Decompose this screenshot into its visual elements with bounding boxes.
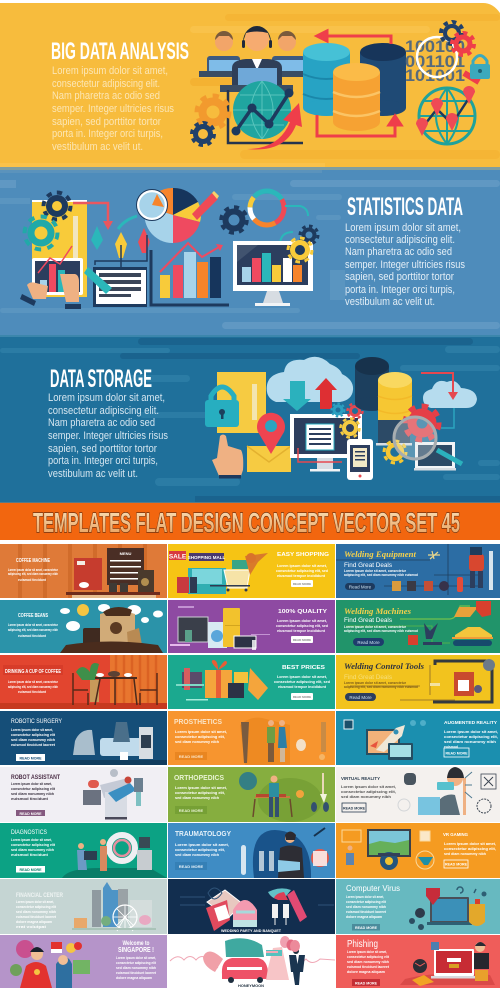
panel: data storage	[0, 335, 500, 502]
heading: big data analysis: BIG DATA ANALYSIS	[51, 38, 189, 65]
panel: virtual reality	[336, 767, 500, 822]
text block: euismod tincidunt	[18, 690, 47, 694]
text block: dolore magna aliquam	[116, 976, 152, 980]
text block: euismod tincidunt	[11, 797, 49, 801]
icon: shopping mall and cart	[169, 551, 268, 594]
text block: storage body: sapien, sed porttitor tortor	[48, 443, 157, 455]
text block	[274, 675, 330, 689]
text block: consectetur adipiscing elit,	[175, 735, 225, 739]
text block: Lorem ipsum dolor sit amet,	[175, 730, 227, 734]
heading: Welding Machines	[344, 607, 411, 616]
text block	[16, 900, 57, 929]
icon: welding control frame	[430, 659, 495, 702]
text block: Find Great Deals	[344, 674, 393, 681]
text block: euismod tincidunt laoreet	[11, 743, 56, 747]
icon: center gears	[332, 404, 362, 438]
icon: navy gear	[192, 123, 214, 145]
text block: statistics body: porta in. Integer orci turpis,	[345, 284, 455, 296]
text block: binary digits	[405, 37, 465, 85]
text block: erat volutpat	[16, 925, 47, 929]
button: READ MORE	[179, 864, 204, 869]
icon: couple in singapore	[10, 940, 90, 988]
text block: big data body: semper. Integer ultricies risus	[52, 103, 174, 115]
heading: ORTHOPEDICS	[174, 775, 224, 782]
text block: sed diam nonummy nibh	[175, 853, 219, 857]
text block: statistics body: consectetur adipiscing elit.	[345, 234, 455, 246]
text block: sed diam nonummy nibh	[175, 796, 219, 800]
text block: adipiscing elit, sed diam nonummy nibh	[8, 628, 58, 632]
icon: orange gear	[197, 96, 229, 128]
text block: adipiscing elit, sed diam nonummy nibh	[8, 685, 58, 689]
panel: financial center	[0, 879, 167, 934]
text block: euismod	[444, 745, 458, 749]
text block: adipiscing elit, sed diam nonummy nibh euismod	[344, 573, 418, 577]
text block	[444, 842, 496, 856]
heading: Phishing	[347, 939, 378, 950]
text block: Lorem ipsum dolor sit amet,	[347, 950, 387, 954]
heading: EASY SHOPPING	[277, 552, 329, 558]
text block: Lorem ipsum dolor sit amet,	[341, 785, 396, 789]
text block: statistics body: sapien, sed porttitor tortor	[345, 271, 454, 283]
button: READ MORE	[179, 754, 204, 759]
text block: Find Great Deals	[344, 562, 393, 569]
button: READ MORE	[20, 812, 42, 816]
text block: statistics body	[345, 222, 465, 308]
text block: adipiscing elit, sed diam nonummy nibh	[8, 572, 58, 576]
button: READ MORE	[293, 695, 311, 699]
text block: consectetur adipiscing elit,	[444, 847, 496, 851]
panel: computer virus	[336, 879, 500, 934]
panel: best prices	[168, 655, 335, 709]
icon: database cylinders	[303, 43, 406, 131]
button: Read More	[349, 695, 372, 700]
panel: orthopedics	[168, 767, 335, 822]
button: READ MORE	[293, 582, 311, 586]
button	[444, 860, 468, 868]
text block: euismod tincidunt laoreet	[347, 965, 390, 969]
icon: magnifier, gears and laptop	[384, 406, 462, 470]
text block: Lorem ipsum dolor sit amet, consectetur	[344, 625, 407, 629]
button	[16, 810, 45, 816]
button	[291, 693, 313, 700]
chart: pie with magnifier	[136, 188, 219, 243]
icon: city skyline with ferris wheel	[72, 882, 156, 931]
button: READ MORE	[446, 752, 468, 756]
text block: Lorem ipsum dolor sit amet,	[11, 838, 52, 842]
heading: HONEYMOON	[238, 983, 264, 988]
text block: euismod tincidunt laoreet	[116, 971, 157, 975]
icon: large cloud with arrows	[267, 357, 353, 411]
text block: Lorem ipsum dolor sit amet,	[175, 843, 229, 847]
text block: Lorem ipsum dolor sit amet, consectetur	[8, 623, 59, 627]
chart: globe with trend line	[228, 81, 303, 150]
text block: Lorem ipsum dolor sit amet,	[444, 730, 498, 734]
icon: tablet held in hands	[20, 246, 83, 309]
text block: consectetur adipiscing elit, sed	[274, 680, 330, 684]
text block: sed diam nonummy nibh	[11, 792, 54, 796]
heading: Welcome to	[122, 941, 150, 947]
panel: welding equipment	[336, 544, 500, 598]
text block: Lorem ipsum dolor sit amet,	[277, 564, 327, 568]
text block: binary digits: 100100	[405, 37, 465, 56]
text block: euismod tincidunt	[18, 634, 47, 638]
text block	[11, 838, 56, 857]
icon: tablet with rocket	[344, 720, 426, 760]
icon: injured man with x-ray	[241, 828, 329, 878]
heading: COFFEE BEANS	[18, 613, 49, 619]
button: READ MORE	[293, 638, 311, 642]
panel: traumatology	[168, 823, 335, 878]
text block: sed diam nonummy nibh	[116, 966, 156, 970]
icon: sacks of coffee	[60, 604, 163, 653]
heading: TRAUMATOLOGY	[175, 831, 231, 838]
heading: VIRTUAL REALITY	[341, 776, 380, 781]
panel: welcome to singapore	[0, 935, 167, 988]
heading: 100% QUALITY	[278, 609, 327, 615]
chart: bar chart with trend	[151, 243, 229, 305]
panel: coffee beans	[0, 600, 167, 653]
text block	[8, 623, 59, 638]
panel: prosthetics	[168, 711, 335, 765]
text block: binary digits: 001101	[405, 52, 465, 71]
text block	[276, 619, 328, 633]
text block: adipiscing elit, sed diam nonummy nibh euismod	[344, 629, 418, 633]
button	[291, 636, 313, 643]
panel: wedding party and banquet	[168, 879, 335, 934]
text block: Lorem ipsum dolor sit amet,	[346, 895, 384, 899]
icon: car, bride and groom	[203, 936, 305, 985]
icon: folder, lock and hand	[205, 372, 266, 478]
text block: sed diam nonummy nibh	[11, 848, 54, 852]
text block: Lorem ipsum dolor sit amet,	[116, 956, 156, 960]
button	[16, 754, 45, 761]
text block: big data body: sapien, sed porttitor tortor	[52, 116, 161, 128]
button: READ MORE	[179, 808, 204, 813]
text block: sed diam nonummy nibh	[175, 740, 219, 744]
panel: easy shopping	[168, 544, 335, 598]
button	[353, 638, 384, 646]
text block: storage body: vestibulum ac velit ut.	[48, 468, 138, 480]
text block: statistics body: Nam pharetra ac odio sed	[345, 246, 452, 258]
icon: coffee machine and menu: MENU	[120, 551, 131, 556]
panel: 100% quality	[168, 600, 335, 653]
text block	[344, 569, 418, 577]
icon: surgical robot scene	[73, 722, 153, 760]
text block: statistics body: semper. Integer ultricies risus	[345, 259, 465, 271]
text block: storage body: Nam pharetra ac odio sed	[48, 417, 155, 429]
text block: sed diam nonummy nibh	[347, 960, 389, 964]
text block: dolore magna aliquam	[347, 970, 385, 974]
panel: statistics data	[0, 170, 500, 335]
heading: ROBOT ASSISTANT	[11, 775, 60, 781]
icon: welder and tools	[392, 547, 493, 592]
text block: euismod tincidunt	[18, 578, 47, 582]
icon: map pin and envelope	[247, 413, 291, 472]
panel: big data analysis	[0, 3, 500, 170]
button	[175, 752, 207, 760]
text block: Lorem ipsum dolor sit amet,	[444, 842, 496, 846]
button	[342, 803, 366, 812]
text block: storage body: semper. Integer ultricies risus	[48, 430, 168, 442]
button: READ MORE	[355, 926, 378, 930]
icon: monitor with bar chart	[233, 241, 313, 306]
text block	[444, 730, 498, 749]
text block: eiusmod tempor incididunt	[277, 629, 326, 633]
icon: patients and prosthetics	[240, 718, 326, 765]
icon: support operators	[199, 26, 305, 92]
text block: euismod tincidunt laoreet	[16, 915, 57, 919]
text block: consectetur adipiscing elit,	[341, 790, 396, 794]
text block	[344, 625, 418, 633]
button	[291, 580, 313, 587]
heading: FINANCIAL CENTER	[16, 892, 63, 899]
icon: gears and donut	[221, 191, 308, 245]
text block: consectetur adipiscing elit,	[175, 848, 225, 852]
panel: welding machines	[336, 600, 500, 653]
text block	[175, 730, 227, 744]
icon: small cloud with arrow	[421, 373, 477, 428]
text block	[276, 564, 328, 578]
text block: consectetur adipiscing elit	[347, 955, 390, 959]
text block: consectetur adipiscing elit	[11, 787, 56, 791]
icon: shopping mall and cart: SHOPPING MALL	[188, 555, 225, 560]
button: READ MORE	[20, 756, 42, 760]
text block: statistics body: vestibulum ac velit ut.	[345, 296, 435, 308]
panel: robot assistant	[0, 767, 167, 822]
heading: DRINKING A CUP OF COFFEE	[5, 669, 62, 675]
text block: Lorem ipsum dolor sit amet, consectetur	[8, 568, 59, 572]
arrow: red data loop	[317, 31, 401, 136]
heading: BEST PRICES	[282, 665, 325, 671]
panel: vr gaming	[336, 823, 500, 878]
icon: small gears	[441, 22, 474, 55]
text block	[175, 843, 229, 857]
text block: sed diam nonummy nibh	[346, 905, 386, 909]
button: Read More	[349, 584, 372, 590]
text block: big data body: Lorem ipsum dolor sit amet,	[52, 65, 168, 77]
text block	[11, 728, 56, 747]
text block: sed diam nonummy nibh	[11, 738, 55, 742]
text block: consectetur adipiscing elit	[11, 843, 56, 847]
button	[175, 806, 207, 814]
icon: yellow document with gears	[24, 192, 87, 297]
button	[345, 583, 375, 590]
heading: data storage: DATA STORAGE	[50, 365, 152, 393]
text block: sed diam nonummy nibh	[444, 740, 496, 744]
heading: Welding Equipment	[344, 550, 417, 559]
text block	[344, 681, 418, 689]
icon: monitor gears	[288, 226, 318, 262]
text block	[8, 680, 59, 694]
button: READ MORE	[445, 862, 468, 866]
text block: adipiscing elit, sed diam nonummy nibh euismod	[344, 685, 418, 689]
text block: Lorem ipsum dolor sit amet,	[16, 900, 54, 904]
text block: consectetur adipiscing elit	[116, 961, 157, 965]
heading: Welding Control Tools	[344, 662, 424, 671]
button	[345, 693, 376, 701]
icon: monitor with document	[290, 414, 362, 472]
text block: consectetur adipiscing elit, sed	[276, 624, 328, 628]
panel: robotic surgery	[0, 711, 167, 765]
text block: sed diam nonummy nibh	[341, 795, 391, 799]
button: READ MORE	[20, 868, 42, 872]
text block: Lorem ipsum dolor sit amet,	[11, 728, 53, 732]
panel: welding control tools	[336, 655, 500, 709]
text block: storage body	[48, 392, 168, 480]
button	[175, 862, 207, 870]
text block: big data body	[52, 65, 174, 153]
icon: heart strings	[170, 956, 335, 968]
text block	[11, 782, 56, 801]
text block: eiusmod tempor incididunt	[278, 685, 327, 689]
icon: shopping mall and cart: SALE	[169, 554, 187, 560]
panel: coffee machine	[0, 544, 167, 598]
text block: consectetur adipiscing elit	[11, 733, 56, 737]
heading: COFFEE MACHINE	[16, 558, 51, 564]
text block: euismod tincidunt laoreet	[346, 910, 387, 914]
icon: globe with map pins	[416, 86, 475, 144]
icon: mri scanner and staff	[77, 835, 152, 871]
icon: document list with pencil	[84, 267, 147, 307]
text block: Lorem ipsum dolor sit amet, consectetur	[344, 569, 407, 573]
button	[352, 924, 380, 930]
text block: sed diam nonummy nibh	[16, 910, 56, 914]
icon: wedding cake and champagne	[180, 888, 334, 931]
text block: big data body: Nam pharetra ac odio sed	[52, 90, 160, 102]
panel: diagnostics	[0, 823, 167, 878]
text block: Lorem ipsum dolor sit amet,	[11, 782, 52, 786]
arrow: red flow arrow	[73, 203, 113, 230]
text block: storage body: consectetur adipiscing elit.	[48, 405, 159, 417]
text block: consectetur adipiscing elit	[346, 900, 387, 904]
panel: honeymoon	[168, 935, 335, 988]
icon: laptop with shield and virus	[409, 887, 486, 930]
icon: hacker, phishing fish and laptop	[400, 942, 495, 986]
text block: storage body: Lorem ipsum dolor sit amet,	[48, 392, 165, 404]
icon: phone	[347, 439, 373, 480]
icon: coffee machine and menu	[66, 548, 160, 598]
text block: big data body: consectetur adipiscing elit.	[52, 78, 160, 90]
text block: Find Great Deals	[344, 617, 393, 624]
banner: set title	[0, 502, 500, 540]
icon: robot assistant scene	[83, 769, 143, 820]
text block	[8, 568, 59, 582]
button	[444, 748, 469, 757]
text block: consectetur adipiscing elit,	[444, 735, 498, 739]
text block	[116, 956, 157, 980]
button: READ MORE	[343, 806, 366, 810]
text block: eiusmod tempor incididunt	[277, 574, 326, 578]
icon: cafe table	[73, 663, 157, 705]
text block	[346, 895, 387, 919]
icon: padlock	[470, 56, 490, 79]
button: READ MORE	[355, 982, 378, 986]
text block: consectetur adipiscing elit	[16, 905, 57, 909]
panel: augmented reality	[336, 711, 500, 765]
icon: gift box and price tag	[176, 660, 268, 700]
icon: person in vr headset	[398, 767, 496, 815]
panel: drinking a cup of coffee	[0, 655, 167, 709]
text block: consectetur adipiscing elit,	[175, 791, 225, 795]
heading: AUGMENTED REALITY	[444, 720, 497, 725]
text block: binary digits: 101001	[405, 66, 465, 85]
heading	[118, 941, 154, 954]
text block: Lorem ipsum dolor sit amet,	[277, 675, 327, 679]
heading: VR GAMING	[443, 832, 468, 837]
icon: magnifier	[417, 37, 479, 82]
icon: teal, yellow and red shapes	[91, 216, 150, 272]
text block: Lorem ipsum dolor sit amet, consectetur	[344, 681, 407, 685]
text block: Lorem ipsum dolor sit amet, consectetur	[8, 680, 59, 684]
icon: home appliances	[170, 606, 270, 650]
icon: game monitor with controls	[342, 829, 434, 870]
icon: robot welding a car	[408, 601, 493, 646]
panel: phishing	[336, 935, 500, 988]
text block	[175, 786, 227, 800]
text block	[347, 950, 390, 974]
heading: ROBOTIC SURGERY	[11, 719, 62, 725]
text block	[341, 785, 396, 799]
text block: dolore magna aliquam	[346, 915, 382, 919]
heading: WEDDING PARTY AND BANQUET	[221, 929, 282, 933]
heading: DIAGNOSTICS	[11, 830, 47, 836]
text block: big data body: porta in. Integer orci turpis,	[52, 128, 163, 140]
text block: storage body: porta in. Integer orci turpis,	[48, 455, 158, 467]
heading: PROSTHETICS	[174, 719, 222, 726]
text block: big data body: vestibulum ac velit ut.	[52, 141, 143, 153]
text block: euismod tincidunt	[11, 853, 49, 857]
text block: consectetur adipiscing elit, sed	[276, 569, 328, 573]
button	[352, 979, 380, 986]
button	[16, 866, 45, 872]
text block: Lorem ipsum dolor sit amet,	[175, 786, 227, 790]
heading: SINGAPORE !	[118, 945, 154, 954]
text block: sed diam nonummy nibh	[444, 852, 486, 856]
button: Read More	[357, 640, 380, 645]
text block: statistics body: Lorem ipsum dolor sit amet,	[345, 222, 461, 234]
text block: Lorem ipsum dolor sit amet,	[277, 619, 327, 623]
icon: massage table and therapist	[239, 772, 329, 817]
heading: Computer Virus	[346, 883, 400, 893]
text block: dolore magna aliquam	[16, 920, 52, 924]
icon: dark and yellow databases	[355, 357, 412, 446]
